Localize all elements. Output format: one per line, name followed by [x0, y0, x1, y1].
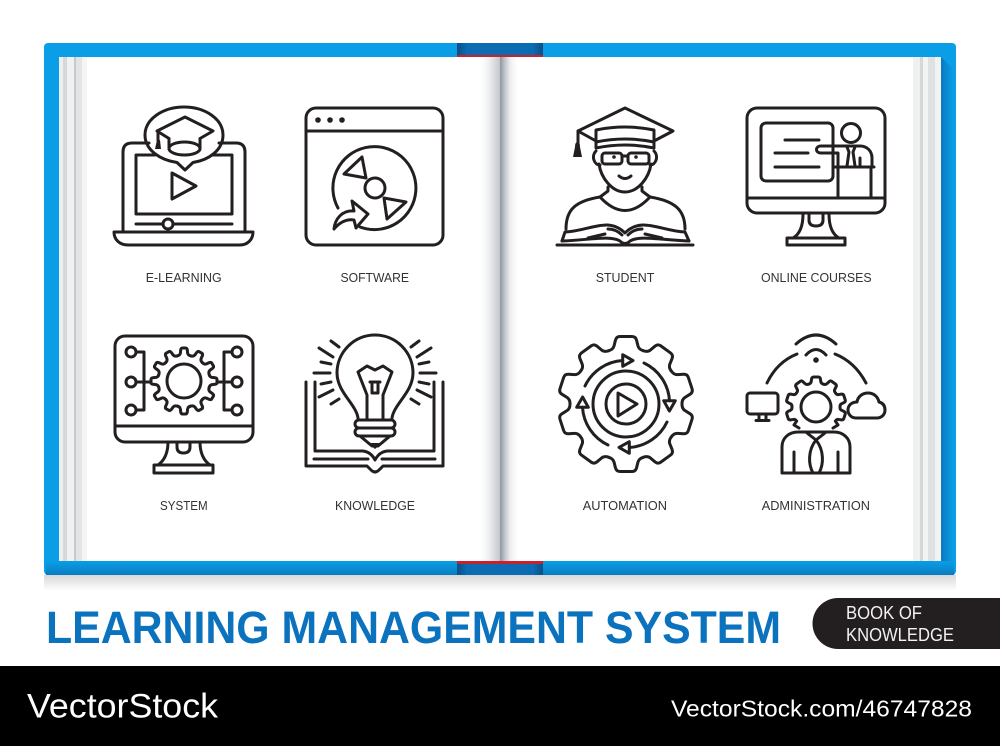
label: e-learning: E-LEARNING: [146, 270, 222, 285]
footer logo: VectorStock: [27, 688, 219, 726]
centre fold shading: [478, 57, 520, 561]
icon: administration: [747, 335, 885, 473]
label: software: SOFTWARE: [340, 270, 409, 285]
badge: book of knowledge: BOOK OF: [846, 603, 922, 623]
badge: book of knowledge: [813, 598, 1000, 649]
blue book cover: [44, 43, 956, 575]
footer image id: VectorStock.com/46747828: [671, 696, 972, 722]
book cast shadow: [44, 575, 956, 591]
label: system: SYSTEM: [160, 498, 208, 513]
footer bar: [0, 666, 1000, 746]
icon: system: [115, 336, 253, 473]
icon: student: [557, 108, 693, 245]
top spine band: [457, 43, 543, 57]
book: [44, 43, 956, 591]
label: automation: AUTOMATION: [583, 498, 667, 513]
label: online courses: ONLINE COURSES: [761, 270, 872, 285]
icon: software: [306, 108, 443, 245]
label: knowledge: KNOWLEDGE: [335, 498, 415, 513]
label: student: STUDENT: [596, 270, 654, 285]
icon: e-learning: [114, 107, 253, 245]
bottom spine band: [457, 561, 543, 575]
left page edges: [59, 57, 87, 561]
cover bottom edge: [46, 561, 954, 575]
right page edges: [913, 57, 941, 561]
title: LEARNING MANAGEMENT SYSTEM: [46, 602, 781, 653]
cover right inner shade: [941, 57, 954, 561]
icon: automation: [556, 336, 696, 472]
icon: knowledge: [306, 335, 443, 472]
badge: book of knowledge: KNOWLEDGE: [846, 625, 954, 645]
icon: online courses: [747, 108, 885, 245]
open pages: [59, 57, 941, 561]
label: administration: ADMINISTRATION: [762, 498, 870, 513]
